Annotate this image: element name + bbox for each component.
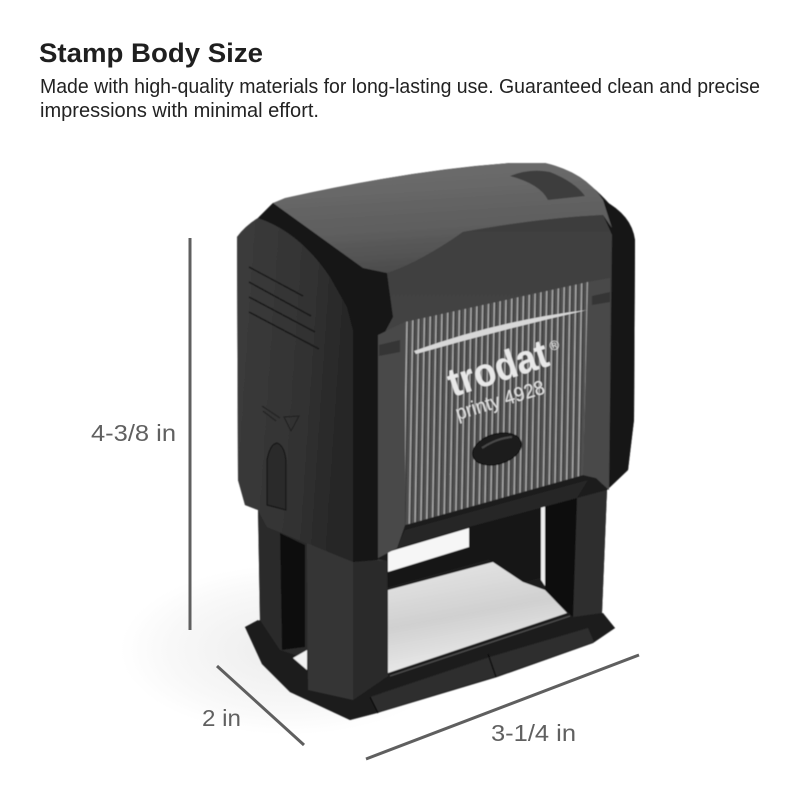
- cap dark patch: [510, 171, 585, 200]
- height dimension line: [188, 238, 192, 630]
- model text: printy 4928: [453, 377, 547, 425]
- width label: 3-1/4 in: [491, 720, 576, 746]
- side small mark: [262, 406, 299, 431]
- front oval button: [469, 427, 525, 471]
- front shell: [378, 215, 612, 558]
- black corner band: [258, 203, 393, 562]
- under-panel band: [397, 480, 588, 548]
- description text: [40, 76, 760, 122]
- lower housing: [258, 490, 607, 700]
- floor shadow: [120, 565, 460, 735]
- base plate: [245, 613, 615, 720]
- panel highlight: [414, 310, 587, 354]
- description text: Made with high-quality materials for long-lasting use. Guaranteed clean and precise: [40, 76, 760, 98]
- right edge: [603, 200, 635, 490]
- window: [388, 497, 577, 676]
- side grip grooves: [249, 267, 319, 349]
- top cap: [273, 163, 612, 273]
- ribbed panel: [405, 282, 588, 525]
- width dimension line: [366, 655, 639, 759]
- title: Stamp Body Size: [39, 38, 263, 68]
- depth dimension line: [217, 666, 304, 745]
- registered mark: ®: [547, 337, 561, 354]
- brand: trodat: trodat: [442, 332, 554, 406]
- depth label: 2 in: [202, 705, 241, 731]
- silhouette: [237, 163, 635, 720]
- description text: impressions with minimal effort.: [40, 100, 319, 122]
- height label: 4-3/8 in: [91, 420, 176, 446]
- stamp illustration: [237, 163, 635, 720]
- side latch: [267, 443, 286, 510]
- side panel: [237, 218, 353, 562]
